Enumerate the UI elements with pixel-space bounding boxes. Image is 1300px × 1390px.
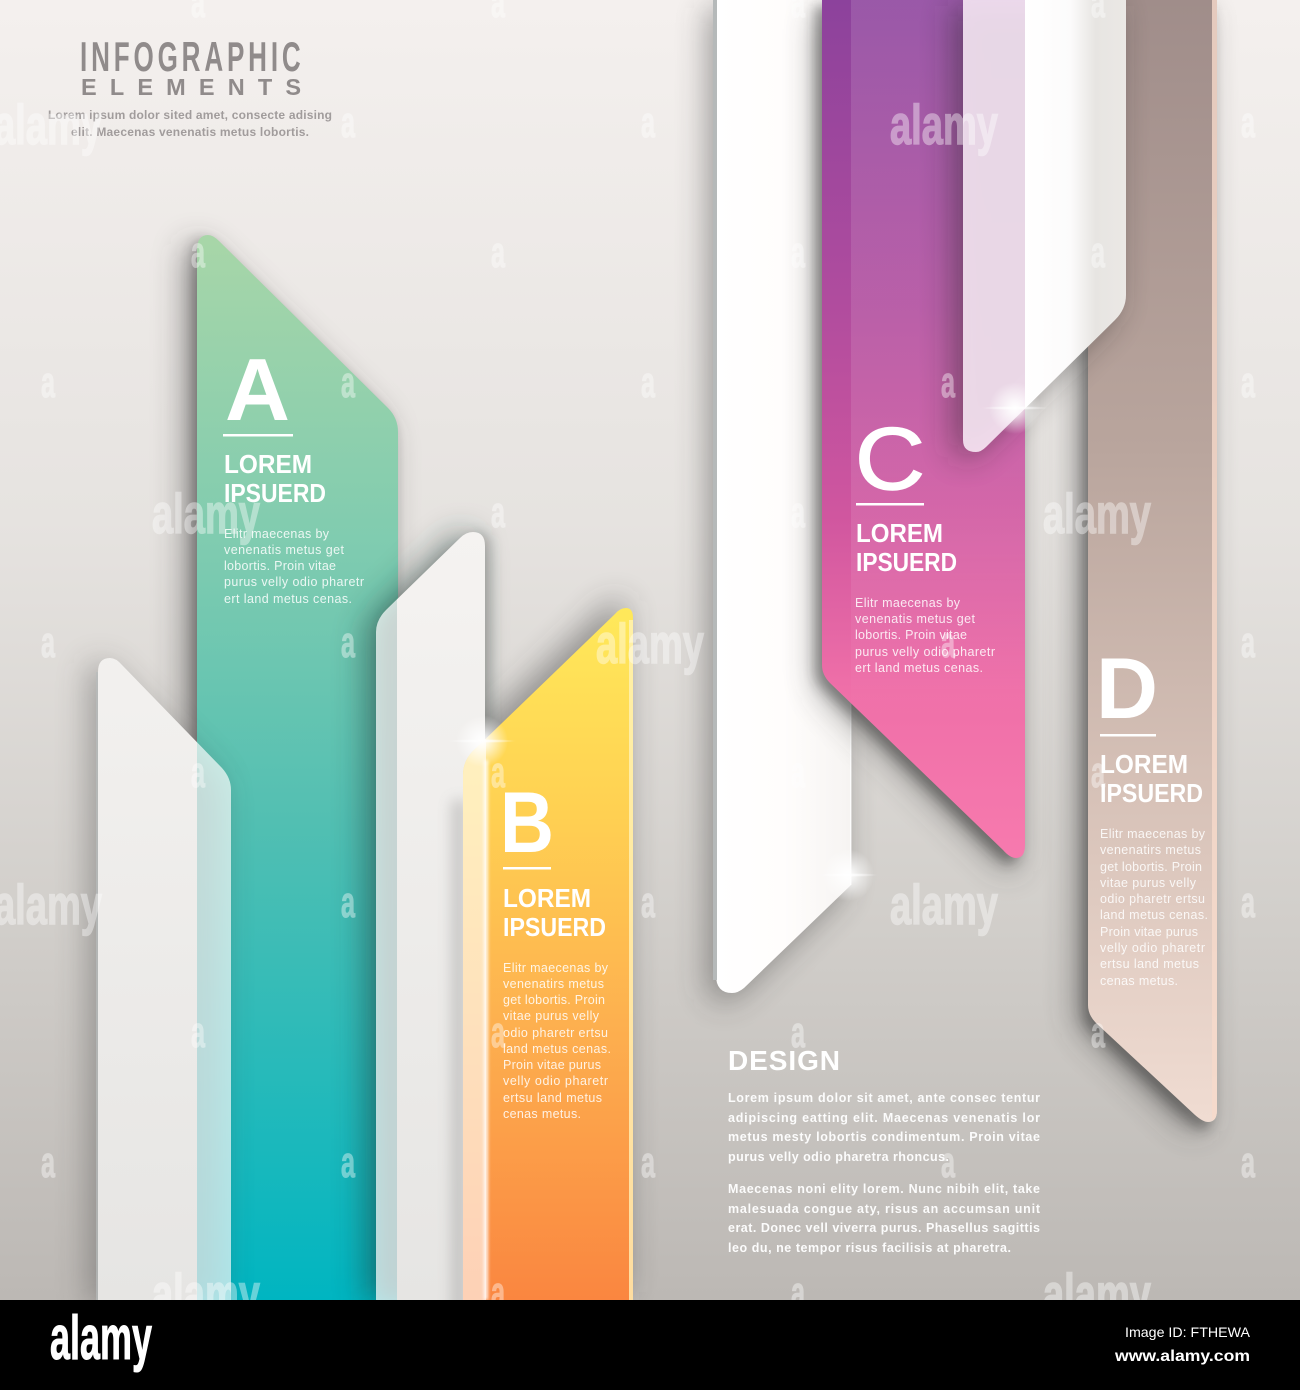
- watermark pattern: a: [641, 878, 655, 927]
- watermark pattern: a: [491, 488, 505, 537]
- text block: D: Elitr maecenas by: [1100, 827, 1206, 841]
- text block: B: cenas metus.: [503, 1107, 581, 1121]
- panel: translucent white strip above C: [953, 0, 1126, 458]
- watermark pattern: a: [491, 228, 505, 277]
- watermark pattern: a: [341, 1138, 355, 1187]
- watermark pattern: alamy: [152, 1262, 260, 1325]
- watermark pattern: a: [41, 358, 55, 407]
- text block: design: DESIGN: [728, 1045, 840, 1076]
- text block: A: IPSUERD: [224, 478, 326, 508]
- watermark pattern: a: [791, 748, 805, 797]
- text block: C: [855, 409, 995, 675]
- watermark pattern: a: [341, 358, 355, 407]
- text block: D: vitae purus velly: [1100, 876, 1197, 890]
- text block: B: Proin vitae purus: [503, 1058, 601, 1072]
- text block: design: Maecenas noni elity lorem. Nunc nibih elit, take: [728, 1182, 1040, 1196]
- text block: B: [500, 775, 611, 1121]
- watermark pattern: a: [41, 1138, 55, 1187]
- text block: design: Lorem ipsum dolor sit amet, ante consec tentur: [728, 1091, 1040, 1105]
- text block: B: velly odio pharetr: [503, 1074, 608, 1088]
- text block: A: [223, 340, 364, 606]
- watermark pattern: a: [1241, 1138, 1255, 1187]
- title block: INFOGRAPHIC: [80, 34, 301, 81]
- text block: B: Elitr maecenas by: [503, 961, 609, 975]
- text block: C: IPSUERD: [856, 547, 957, 577]
- watermark pattern: a: [1241, 98, 1255, 147]
- text block: D: get lobortis. Proin: [1100, 860, 1202, 874]
- text block: A: venenatis metus get: [224, 543, 345, 557]
- text block: design: adipiscing eatting elit. Maecenas venenatis lor: [728, 1111, 1040, 1125]
- watermark pattern: a: [941, 358, 955, 407]
- watermark pattern: a: [941, 1138, 955, 1187]
- text block: B: land metus cenas.: [503, 1042, 611, 1056]
- text block: design: erat. Donec vell viverra purus. Phasellus sagittis: [728, 1221, 1040, 1235]
- watermark pattern: a: [1091, 1008, 1105, 1057]
- light flares: [448, 382, 1049, 901]
- text block: D: cenas metus.: [1100, 974, 1178, 988]
- text block: C: LOREM: [856, 518, 943, 548]
- title block: ELEMENTS: [81, 74, 301, 100]
- watermark pattern: a: [341, 618, 355, 667]
- text block: B: B: [500, 775, 554, 871]
- text block: D: [1096, 641, 1208, 988]
- text block: B: IPSUERD: [503, 912, 606, 942]
- panel: white strip beside C: [708, 0, 852, 1001]
- watermark pattern: a: [491, 1268, 505, 1317]
- watermark pattern: a: [1091, 228, 1105, 277]
- watermark pattern: alamy: [152, 482, 260, 545]
- watermark pattern: a: [341, 98, 355, 147]
- panel: C pink banner: [815, 0, 1026, 872]
- watermark pattern: a: [1241, 358, 1255, 407]
- shadow: behind B banner: [455, 600, 625, 1292]
- watermark pattern: a: [41, 618, 55, 667]
- text block: design: [728, 1045, 1041, 1255]
- text block: A: lobortis. Proin vitae: [224, 559, 336, 573]
- text block: C: lobortis. Proin vitae: [855, 628, 967, 642]
- text block: A: ert land metus cenas.: [224, 592, 352, 606]
- text block: C: purus velly odio pharetr: [855, 645, 995, 659]
- text block: D: D: [1096, 641, 1158, 737]
- panel: white strip right of A: [366, 532, 491, 1340]
- watermark pattern: a: [191, 228, 205, 277]
- text block: D: land metus cenas.: [1100, 908, 1208, 922]
- watermark pattern: alamy: [596, 612, 704, 675]
- text block: A: Elitr maecenas by: [224, 527, 330, 541]
- title block: Lorem ipsum dolor sited amet, consecte adising: [48, 108, 332, 122]
- text block: A: purus velly odio pharetr: [224, 575, 364, 589]
- text block: A: LOREM: [224, 449, 312, 479]
- title block: elit. Maecenas venenatis metus lobortis.: [71, 125, 309, 139]
- text block: A: A: [225, 340, 290, 439]
- watermark pattern: a: [641, 358, 655, 407]
- watermark pattern: alamy: [890, 93, 998, 156]
- watermark pattern: a: [341, 878, 355, 927]
- text block: B: get lobortis. Proin: [503, 993, 605, 1007]
- text block: D: velly odio pharetr: [1100, 941, 1205, 955]
- text block: B: venenatirs metus: [503, 977, 604, 991]
- text block: B: LOREM: [503, 883, 591, 913]
- text block: C: C: [855, 409, 925, 508]
- watermark pattern: a: [1241, 878, 1255, 927]
- text block: B: ertsu land metus: [503, 1091, 602, 1105]
- watermark pattern: a: [191, 1008, 205, 1057]
- text block: C: Elitr maecenas by: [855, 596, 961, 610]
- watermark pattern: a: [491, 1008, 505, 1057]
- watermark pattern: a: [791, 1268, 805, 1317]
- text block: B: odio pharetr ertsu: [503, 1026, 608, 1040]
- text block: design: metus mesty lobortis condimentum. Proin vitae: [728, 1130, 1040, 1144]
- watermark pattern: a: [191, 748, 205, 797]
- footer bar: alamy: [50, 1304, 152, 1373]
- watermark pattern: alamy: [1043, 1262, 1151, 1325]
- text block: C: ert land metus cenas.: [855, 661, 983, 675]
- watermark pattern: a: [791, 1008, 805, 1057]
- watermark pattern: a: [1091, 748, 1105, 797]
- watermark pattern: a: [941, 618, 955, 667]
- footer bar: Image ID: FTHEWA: [1125, 1324, 1251, 1340]
- panel: B yellow banner: [463, 608, 633, 1300]
- watermark pattern: a: [641, 1138, 655, 1187]
- panel: white strip left of A: [88, 658, 231, 1304]
- text block: D: odio pharetr ertsu: [1100, 892, 1205, 906]
- panel: D taupe banner: [1076, 0, 1217, 1132]
- watermark pattern: a: [791, 488, 805, 537]
- text block: B: vitae purus velly: [503, 1009, 600, 1023]
- watermark pattern: a: [491, 748, 505, 797]
- title block: [48, 34, 332, 139]
- watermark pattern: a: [641, 98, 655, 147]
- panel: A green banner: [185, 235, 398, 1308]
- text block: design: purus velly odio pharetra rhoncus.: [728, 1150, 949, 1164]
- text block: D: ertsu land metus: [1100, 957, 1199, 971]
- text block: C: venenatis metus get: [855, 612, 976, 626]
- watermark pattern: alamy: [890, 873, 998, 936]
- text block: design: malesuada congue aty, risus an accumsan unit: [728, 1202, 1041, 1216]
- text block: D: venenatirs metus: [1100, 843, 1201, 857]
- text block: D: LOREM: [1100, 749, 1188, 779]
- text block: D: IPSUERD: [1100, 778, 1203, 808]
- text block: design: leo du, ne tempor risus facilisis at pharetra.: [728, 1241, 1011, 1255]
- footer bar: [0, 1300, 1300, 1390]
- text block: D: Proin vitae purus: [1100, 925, 1198, 939]
- watermark pattern: a: [791, 228, 805, 277]
- watermark pattern: alamy: [1043, 482, 1151, 545]
- footer bar: www.alamy.com: [1114, 1348, 1250, 1365]
- watermark pattern: a: [1241, 618, 1255, 667]
